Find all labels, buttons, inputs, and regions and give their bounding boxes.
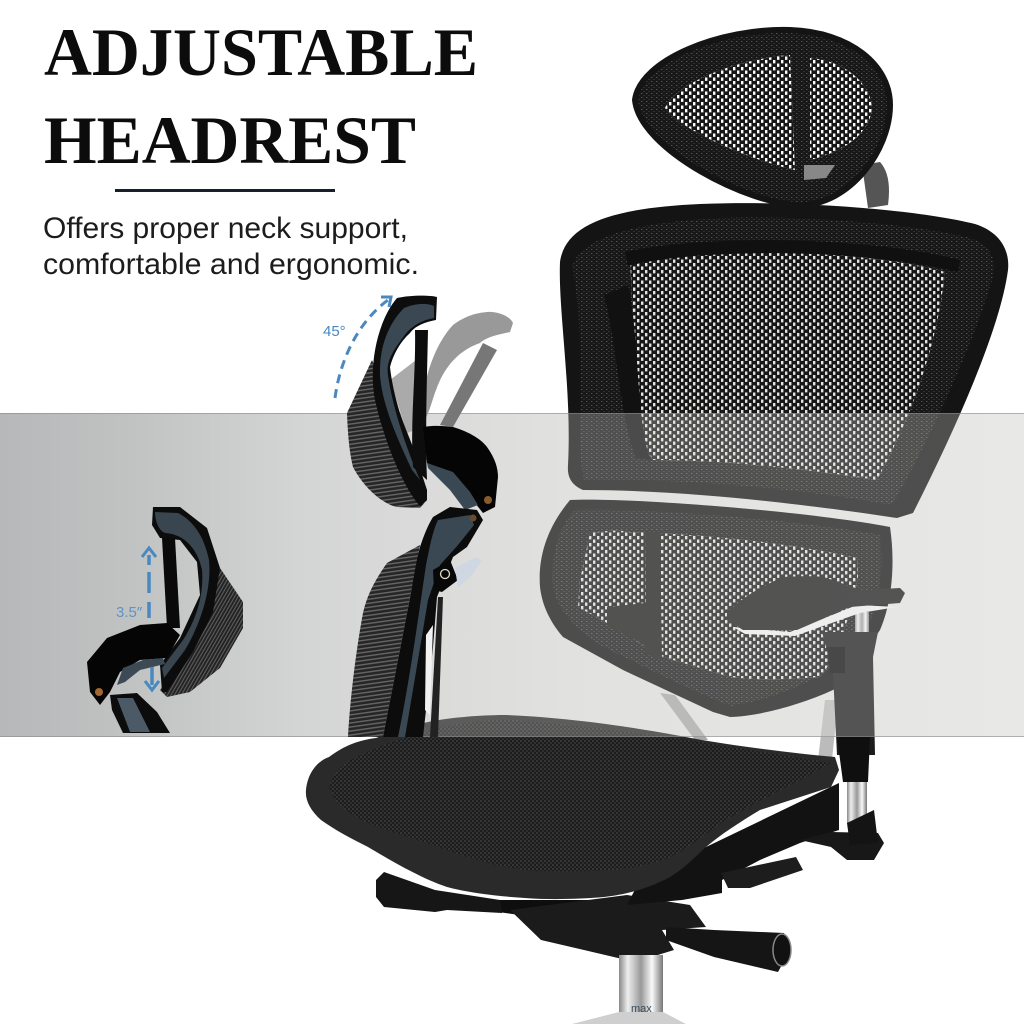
title: ADJUSTABLE <box>44 14 478 90</box>
3.5 inch arrow <box>116 548 159 690</box>
title: HEADREST <box>44 102 416 178</box>
upper side-view headrest <box>347 296 498 737</box>
chair lower back <box>540 500 893 760</box>
45 degree arrow: 45° <box>323 323 346 340</box>
chair headrest <box>635 30 890 208</box>
title <box>44 14 478 178</box>
chair arm rest <box>727 576 905 636</box>
chair seat <box>306 715 884 962</box>
chair arm post <box>822 612 878 845</box>
chair base and lever: max <box>631 1003 652 1015</box>
3.5 inch arrow: 3.5″ <box>116 604 143 621</box>
description text <box>43 212 419 281</box>
chair base and lever <box>572 927 791 1024</box>
description text: comfortable and ergonomic. <box>43 248 419 281</box>
ghost headrest position <box>390 312 513 433</box>
lower side-view headrest <box>87 507 243 733</box>
gray band overlay over chair <box>0 413 1024 737</box>
chair backrest <box>560 203 1008 518</box>
description text: Offers proper neck support, <box>43 212 408 245</box>
45 degree arrow <box>323 297 391 398</box>
gray band background <box>0 413 1024 737</box>
